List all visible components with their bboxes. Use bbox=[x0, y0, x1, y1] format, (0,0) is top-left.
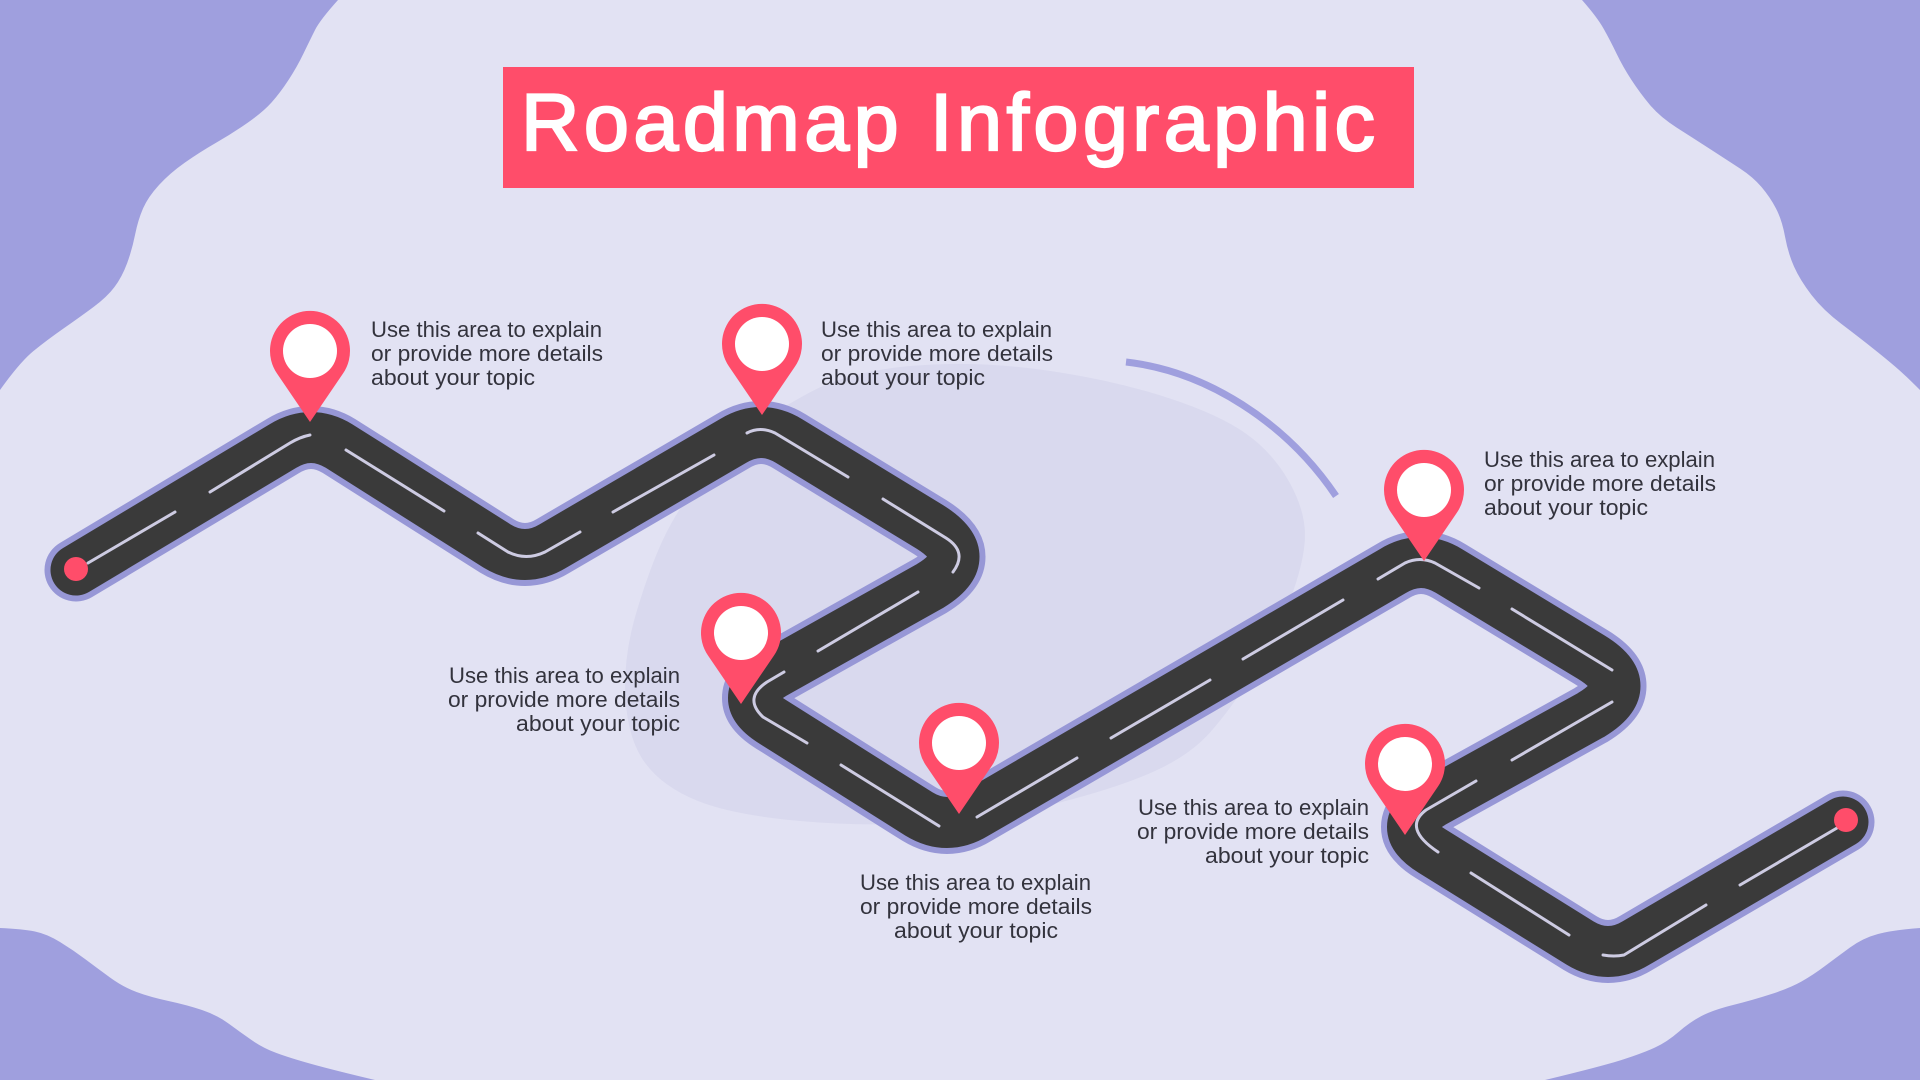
road centre dashes bbox=[88, 430, 1837, 956]
text block 6 bbox=[1137, 795, 1369, 868]
pin 1 bbox=[270, 311, 350, 422]
text block 1: Use this area to explain bbox=[371, 317, 602, 342]
title text: Roadmap Infographic bbox=[521, 78, 1375, 168]
pin 4 bbox=[919, 703, 999, 814]
text block 5 bbox=[1484, 447, 1716, 520]
text block 4: about your topic bbox=[894, 918, 1058, 943]
background blob bbox=[625, 364, 1305, 824]
text block 2: about your topic bbox=[821, 365, 985, 390]
text block 5: or provide more details bbox=[1484, 471, 1716, 496]
decorative arc bbox=[1126, 362, 1336, 496]
text block 1 bbox=[371, 317, 603, 390]
title banner bbox=[503, 67, 1414, 188]
text block 1: or provide more details bbox=[371, 341, 603, 366]
text block 6: Use this area to explain bbox=[1138, 795, 1369, 820]
text block 6: or provide more details bbox=[1137, 819, 1369, 844]
road outline bbox=[76, 432, 1843, 952]
text block 3: or provide more details bbox=[448, 687, 680, 712]
pin 5 bbox=[1384, 450, 1464, 561]
corner shape: top right bbox=[1582, 0, 1920, 390]
pin 2 bbox=[722, 304, 802, 415]
text block 3 bbox=[448, 663, 680, 736]
start marker bbox=[64, 557, 88, 581]
corner shape: top left bbox=[0, 0, 338, 390]
road surface bbox=[76, 432, 1843, 952]
text block 4: Use this area to explain bbox=[860, 870, 1091, 895]
pin 6 bbox=[1365, 724, 1445, 835]
text block 4 bbox=[860, 870, 1092, 943]
pin 3 bbox=[701, 593, 781, 704]
text block 2 bbox=[821, 317, 1053, 390]
end marker bbox=[1834, 808, 1858, 832]
corner shape: bottom right bbox=[1545, 928, 1920, 1080]
corner shape: bottom left bbox=[0, 928, 375, 1080]
text block 1: about your topic bbox=[371, 365, 535, 390]
road bbox=[76, 430, 1843, 956]
text block 3: Use this area to explain bbox=[449, 663, 680, 688]
title bbox=[503, 67, 1414, 188]
text block 5: about your topic bbox=[1484, 495, 1648, 520]
text block 3: about your topic bbox=[516, 711, 680, 736]
text block 2: Use this area to explain bbox=[821, 317, 1052, 342]
text block 2: or provide more details bbox=[821, 341, 1053, 366]
text block 6: about your topic bbox=[1205, 843, 1369, 868]
text block 4: or provide more details bbox=[860, 894, 1092, 919]
text block 5: Use this area to explain bbox=[1484, 447, 1715, 472]
